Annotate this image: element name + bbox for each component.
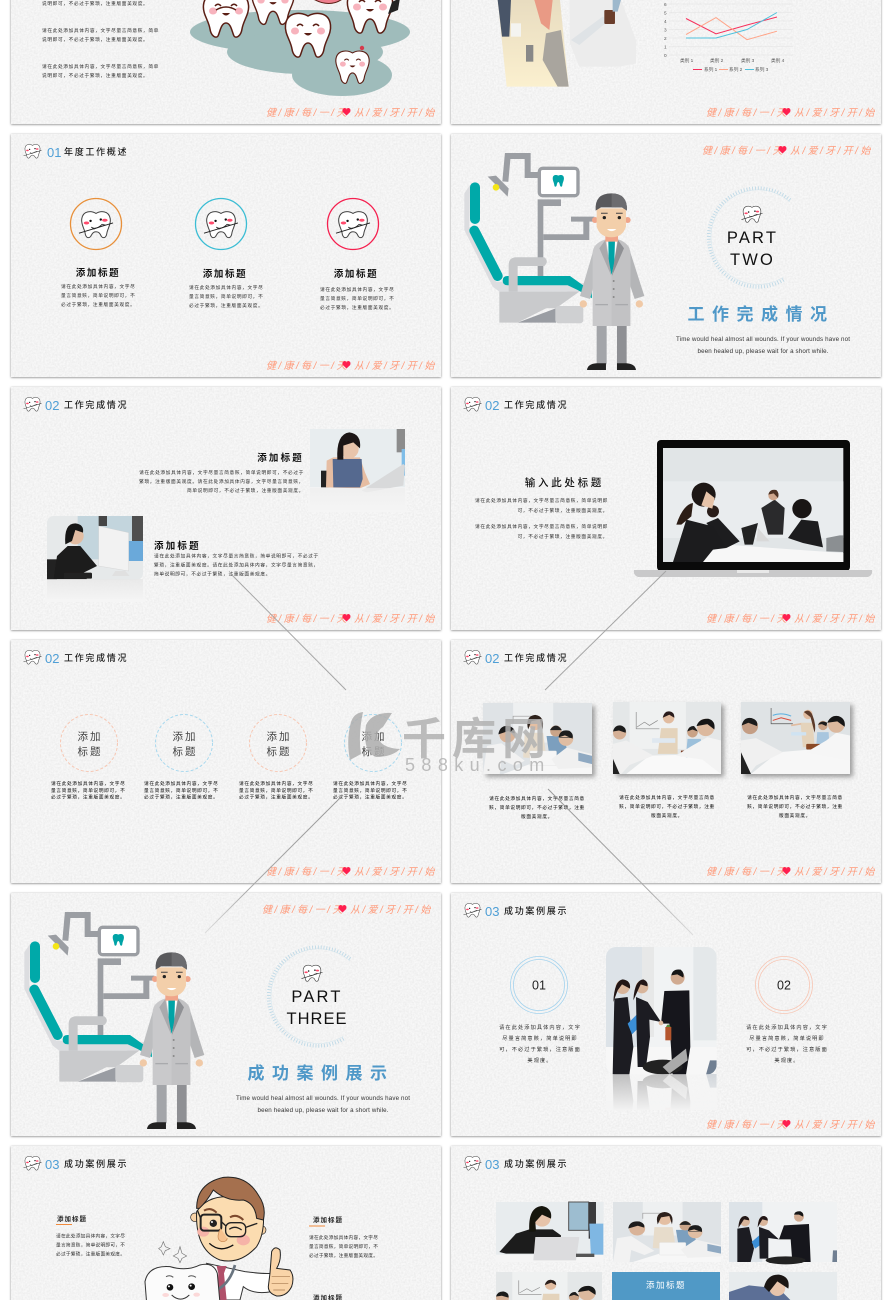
text block left: 请在此处添加具体内容，文字尽 <box>56 1232 125 1240</box>
item four: 标题 <box>362 746 386 758</box>
case 01: 美观度。 <box>527 1056 553 1064</box>
item one: 请在此处添加具体内容，文字尽 <box>51 780 125 787</box>
panel: annual work overview <box>11 134 441 377</box>
heading: 工作完成情况 <box>64 399 128 410</box>
item four: 必过于繁琐，注重版面美观度。 <box>333 794 407 800</box>
line chart: 类别 1 <box>680 57 694 64</box>
english caption: been healed up, please wait for a short while. <box>698 348 829 355</box>
item: crimson tooth circle: 请在此处添加具体内容，文字尽 <box>320 286 394 293</box>
line chart: 2 <box>664 36 667 41</box>
case 02 <box>746 956 828 1064</box>
text block left: 添加标题 <box>57 1214 87 1223</box>
caption three <box>747 794 843 819</box>
item: crimson tooth circle: 必过于繁琐，注重版面美观度。 <box>320 304 394 311</box>
decorative diagonal line one <box>230 573 346 690</box>
line chart: 5 <box>664 10 667 16</box>
illustration: dental chair and dentist <box>24 915 204 1129</box>
item: orange tooth circle <box>61 198 135 308</box>
panel: part two cover <box>451 134 881 377</box>
heading: 02 <box>485 398 499 413</box>
panel: photos and line chart <box>451 0 881 124</box>
photo two <box>613 702 721 774</box>
panel: success cases <box>450 892 882 1138</box>
photo: meeting table <box>498 0 569 87</box>
heading: 03 <box>485 1157 499 1172</box>
text block: second item: 添加标题 <box>154 540 201 552</box>
text block: second item <box>154 540 319 578</box>
text block right <box>309 1215 378 1259</box>
line chart: 系列 1 <box>704 66 718 73</box>
photo tile: team at laptop <box>613 1202 721 1262</box>
slogan: 从/爱/牙/开/始 <box>794 613 877 625</box>
slogan: 健/康/每/一/天 <box>266 107 349 119</box>
photo: woman on phone <box>47 516 143 580</box>
text block left: 必过于繁琐，注重版面美观度。 <box>56 1250 125 1258</box>
caption three: 请在此处添加具体内容，文字尽量言简意 <box>747 794 843 801</box>
heading: 工作完成情况 <box>504 652 568 663</box>
item four: 量言简意赅，简单说明即可，不 <box>333 787 407 794</box>
dial ring <box>269 947 350 1046</box>
english caption: been healed up, please wait for a short while. <box>258 1107 389 1114</box>
item two: 必过于繁琐，注重版面美观度。 <box>144 794 218 800</box>
item one: 量言简意赅，简单说明即可，不 <box>51 787 125 794</box>
item three: 标题 <box>266 746 292 758</box>
item: orange tooth circle: 添加标题 <box>76 267 120 279</box>
text block: 请在此处添加具体内容，文字尽量言简意赅，简单说明即 <box>475 497 608 504</box>
english caption: Time would heal almost all wounds. If your wounds have not <box>676 336 850 343</box>
case 01: 请在此处添加具体内容，文字 <box>499 1023 581 1031</box>
line chart: 6 <box>664 2 667 7</box>
watermark: 588ku logo: 588ku.com <box>405 755 551 775</box>
heading <box>464 903 568 919</box>
button: add title <box>612 1272 720 1300</box>
slogan: 从/爱/牙/开/始 <box>354 866 437 878</box>
slogan: 从/爱/牙/开/始 <box>350 904 433 916</box>
item three: 必过于繁琐，注重版面美观度。 <box>239 794 313 800</box>
item: cyan tooth circle: 必过于繁琐，注重版面美观度。 <box>189 302 263 309</box>
text block right: 量言简意赅，简单说明即可，不 <box>309 1243 378 1250</box>
section title: 成功案例展示 <box>248 1063 394 1083</box>
heading: 工作完成情况 <box>64 652 128 663</box>
heading: 成功案例展示 <box>64 1158 128 1169</box>
slogan: 从/爱/牙/开/始 <box>794 107 877 119</box>
text block left: 量言简意赅，简单说明即可，不 <box>56 1242 125 1248</box>
slogan: 健/康/每/一/天 <box>706 107 789 119</box>
caption three: 版面美观度。 <box>779 812 811 819</box>
photo: woman at laptop <box>310 429 405 507</box>
heading <box>464 397 568 413</box>
item two: 请在此处添加具体内容，文字尽 <box>144 780 218 787</box>
case 02: 02 <box>777 978 791 992</box>
slogan: 健/康/每/一/天 <box>706 613 789 625</box>
heading: 01 <box>47 145 61 160</box>
illustration: cartoon dentist and tooth <box>145 1177 293 1300</box>
text block: intro paragraphs: 说明即可，不必过于繁琐，注重版面美观度。 <box>42 36 148 43</box>
item two: 标题 <box>172 746 198 758</box>
caption one <box>489 795 585 820</box>
text block: second item: 繁琐，注重版面美观度。请在此处添加具体内容，文字尽量言简意赅， <box>154 562 319 568</box>
tooth icon <box>302 965 322 981</box>
slogan: 健/康/每/一/天 <box>266 360 349 372</box>
line chart: 1 <box>664 44 667 50</box>
photo one <box>483 703 592 774</box>
item: cyan tooth circle: 添加标题 <box>203 268 247 280</box>
case 02: 尽量言简意赅，简单说明即 <box>749 1034 825 1042</box>
heading: 03 <box>485 904 499 919</box>
item one <box>51 714 125 800</box>
text block: 可，不必过于繁琐，注重版面美观度。 <box>518 533 608 540</box>
part label: PART <box>291 988 343 1006</box>
item: orange tooth circle: 必过于繁琐，注重版面美观度。 <box>61 301 135 308</box>
heading: 02 <box>485 651 499 666</box>
slogan: 健/康/每/一/天 <box>262 904 345 916</box>
caption two: 版面美观度。 <box>651 812 683 819</box>
item two: 添加 <box>172 730 198 743</box>
line chart: 类别 3 <box>741 57 755 64</box>
tooth icon <box>742 206 762 222</box>
item: crimson tooth circle: 添加标题 <box>334 268 378 280</box>
dial ring <box>709 188 790 287</box>
text block <box>475 476 608 540</box>
illustration: tooth family on teal blob <box>190 0 410 96</box>
text block: 可，不必过于繁琐，注重版面美观度。 <box>518 507 608 514</box>
caption one: 赅，简单说明即可，不必过于繁琐，注重 <box>489 804 585 811</box>
text block: intro paragraphs: 说明即可，不必过于繁琐，注重版面美观度。 <box>42 72 148 79</box>
slogan: 健/康/每/一/天 <box>266 866 349 878</box>
slogan <box>266 613 437 625</box>
item: crimson tooth circle <box>320 198 394 311</box>
case 01: 01 <box>532 978 546 992</box>
text block: second item: 简单说明即可，不必过于繁琐，注重版面美观度。 <box>154 570 271 578</box>
slogan <box>706 866 877 878</box>
heading <box>24 144 128 160</box>
item: orange tooth circle: 请在此处添加具体内容，文字尽 <box>61 283 135 290</box>
item: cyan tooth circle: 请在此处添加具体内容，文字尽 <box>189 284 263 291</box>
text block left <box>56 1214 125 1258</box>
panel: cartoon dentist with tooth <box>11 1146 441 1300</box>
slogan <box>266 360 437 372</box>
slogan: 从/爱/牙/开/始 <box>794 1119 877 1131</box>
item: cyan tooth circle: 量言简意赅，简单说明即可，不 <box>189 293 263 300</box>
part label: TWO <box>730 251 775 269</box>
item four <box>333 714 407 800</box>
slogan: 健/康/每/一/天 <box>706 866 789 878</box>
item one: 标题 <box>78 746 102 758</box>
heading: 年度工作概述 <box>64 146 128 157</box>
part label <box>727 229 778 269</box>
item three <box>239 714 313 800</box>
heading: 工作完成情况 <box>504 399 568 410</box>
item one: 添加 <box>78 730 102 743</box>
slogan <box>266 866 437 878</box>
text block: first item: 请在此处添加具体内容，文字尽量言简意赅，简单说明即可，不必过于 <box>139 469 304 476</box>
heading <box>464 1156 568 1172</box>
line chart: 4 <box>664 19 667 24</box>
caption one: 请在此处添加具体内容，文字尽量言简意 <box>489 795 585 802</box>
item two <box>144 714 218 800</box>
photo three <box>741 702 850 774</box>
item: cyan tooth circle <box>189 198 263 309</box>
photo tile: presentation <box>496 1272 602 1300</box>
part label: PART <box>727 229 778 247</box>
part label: THREE <box>287 1010 347 1028</box>
photo tile: woman at laptop <box>496 1202 604 1262</box>
slogan: 从/爱/牙/开/始 <box>790 145 873 157</box>
item two: 量言简意赅，简单说明即可，不 <box>144 787 218 794</box>
line chart: 系列 2 <box>729 66 743 73</box>
photo reflection <box>612 1074 716 1110</box>
heading <box>24 650 128 666</box>
panel: photo gallery <box>451 1146 881 1300</box>
heading: 02 <box>45 651 59 666</box>
line chart <box>664 2 793 73</box>
english caption: Time would heal almost all wounds. If your wounds have not <box>236 1095 410 1102</box>
slogan: 健/康/每/一/天 <box>702 145 785 157</box>
item: orange tooth circle: 量言简意赅，简单说明即可，不 <box>61 292 135 299</box>
item three: 添加 <box>266 730 292 743</box>
text block: intro paragraphs: 说明即可，不必过于繁琐，注重版面美观度。 <box>42 0 148 7</box>
text block: first item: 繁琐，注重版面美观度。请在此处添加具体内容，文字尽量言简意赅， <box>139 478 304 485</box>
slogan <box>706 1119 877 1131</box>
heading: 02 <box>45 398 59 413</box>
slogan <box>266 107 437 119</box>
slogan: 从/爱/牙/开/始 <box>354 107 437 119</box>
case 02: 美观度。 <box>774 1056 800 1064</box>
case 01 <box>499 956 581 1064</box>
slogan <box>706 107 877 119</box>
panel: work completion with laptop <box>451 387 881 630</box>
caption three: 赅，简单说明即可，不必过于繁琐，注重 <box>747 803 843 810</box>
photo tile: woman leaning <box>729 1272 837 1300</box>
english caption <box>236 1095 410 1114</box>
slogan <box>706 613 877 625</box>
caption one: 版面美观度。 <box>521 813 553 820</box>
text block right: 添加标题 <box>313 1215 343 1224</box>
line chart: 系列 3 <box>755 66 769 73</box>
slogan: 从/爱/牙/开/始 <box>354 613 437 625</box>
item four: 添加 <box>362 730 386 743</box>
photo: white meeting desk <box>569 0 636 67</box>
heading <box>24 397 128 413</box>
item three: 请在此处添加具体内容，文字尽 <box>239 780 313 787</box>
watermark: 588ku logo: 千库网 <box>402 715 552 764</box>
text block: 输入此处标题 <box>525 476 604 489</box>
english caption <box>676 336 850 355</box>
item three: 量言简意赅，简单说明即可，不 <box>239 787 313 794</box>
case 02: 请在此处添加具体内容，文字 <box>746 1023 828 1031</box>
slogan <box>262 904 433 916</box>
section title: 工作完成情况 <box>688 304 834 324</box>
text block: second item: 请在此处添加具体内容，文字尽量言简意赅，简单说明即可，不必过于 <box>154 552 319 560</box>
heading <box>464 650 568 666</box>
line chart: 类别 2 <box>710 57 724 64</box>
line chart: 0 <box>664 53 667 58</box>
button: add title: 添加标题 <box>646 1280 686 1290</box>
photo tile: handshake <box>729 1202 837 1264</box>
text block: 请在此处添加具体内容，文字尽量言简意赅，简单说明即 <box>475 523 608 530</box>
heading: 03 <box>45 1157 59 1172</box>
slogan: 从/爱/牙/开/始 <box>794 866 877 878</box>
line chart: 类别 4 <box>771 57 785 64</box>
panel: part three cover <box>11 893 441 1136</box>
panel: intro text with tooth family <box>11 0 441 124</box>
laptop with meeting photo <box>634 440 872 577</box>
watermark: 588ku logo <box>348 712 552 775</box>
case 01: 可，不必过于繁琐，注意版面 <box>499 1045 581 1053</box>
text block: intro paragraphs <box>42 0 159 79</box>
text block right: 必过于繁琐，注重版面美观度。 <box>309 1252 378 1259</box>
decorative diagonal line three <box>205 795 343 933</box>
slogan <box>702 145 873 157</box>
slogan: 健/康/每/一/天 <box>266 613 349 625</box>
text block: first item: 添加标题 <box>257 452 304 464</box>
heading <box>24 1156 128 1172</box>
item four: 请在此处添加具体内容，文字尽 <box>333 780 407 787</box>
item one: 必过于繁琐，注重版面美观度。 <box>51 794 125 800</box>
text block: first item: 简单说明即可，不必过于繁琐，注重版面美观度。 <box>187 487 304 494</box>
panel: three meeting photos <box>451 640 881 883</box>
text block: first item <box>139 452 304 494</box>
case 02: 可，不必过于繁琐，注意版面 <box>746 1045 828 1053</box>
decorative diagonal line four <box>548 789 693 935</box>
illustration: dental chair and dentist <box>464 156 644 370</box>
heading: 成功案例展示 <box>504 1158 568 1169</box>
heading: 成功案例展示 <box>504 905 568 916</box>
part label <box>287 988 347 1028</box>
decorative diagonal line two <box>545 571 666 690</box>
photo reflection <box>308 488 407 512</box>
text block: intro paragraphs: 请在此处添加具体内容，文字尽量言简意赅，简单 <box>42 63 159 70</box>
caption two <box>619 794 715 819</box>
text block: intro paragraphs: 请在此处添加具体内容，文字尽量言简意赅，简单 <box>42 27 159 34</box>
slogan: 健/康/每/一/天 <box>706 1119 789 1131</box>
caption two: 赅，简单说明即可，不必过于繁琐，注重 <box>619 803 715 810</box>
panel: four dashed circles <box>11 640 441 883</box>
photo: handshake <box>606 947 717 1075</box>
photo reflection <box>45 579 145 602</box>
panel: work completion with two portraits <box>11 387 441 630</box>
case 01: 尽量言简意赅，简单说明即 <box>502 1034 578 1042</box>
slogan: 从/爱/牙/开/始 <box>354 360 437 372</box>
text block right: 请在此处添加具体内容，文字尽 <box>309 1234 378 1241</box>
line chart: 3 <box>664 28 667 32</box>
item: crimson tooth circle: 量言简意赅，简单说明即可，不 <box>320 295 394 302</box>
caption two: 请在此处添加具体内容，文字尽量言简意 <box>619 794 715 801</box>
